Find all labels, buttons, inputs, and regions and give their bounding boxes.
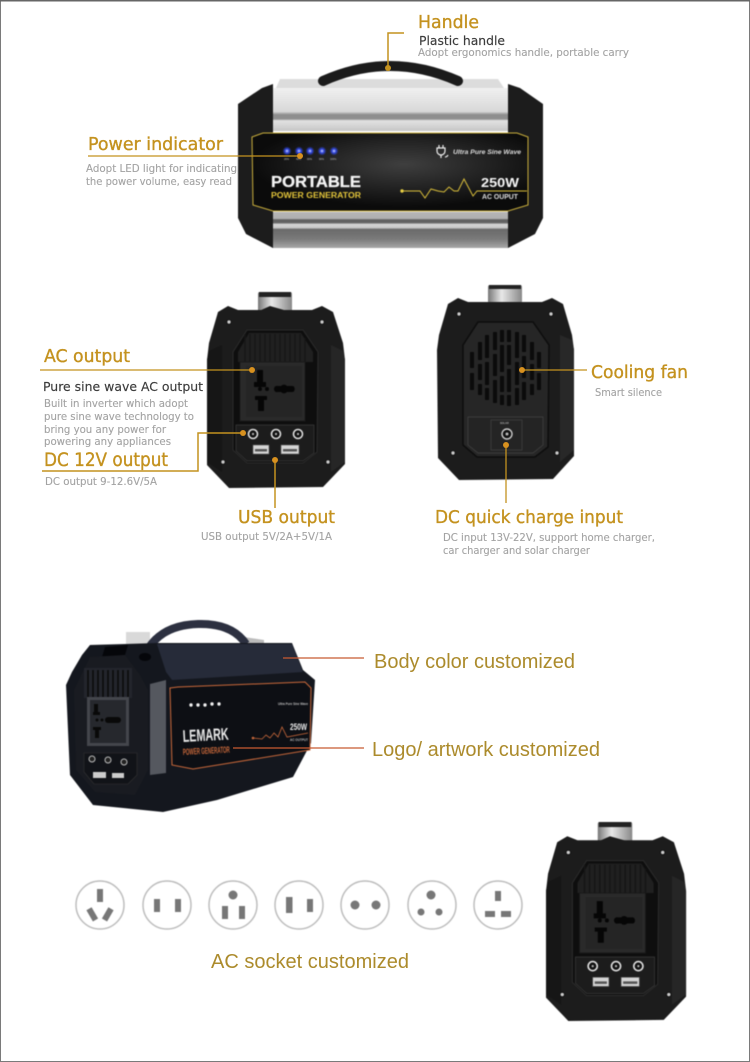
callout: DC quick charge input: car charger and solar charger [443, 545, 591, 557]
callout: AC output: bring you any power for [44, 424, 167, 436]
callout: USB output [201, 457, 335, 543]
socket type icons [76, 881, 522, 929]
black left end cap [238, 84, 273, 248]
tagline: Ultra Pure Sine Wave [278, 702, 308, 706]
caption: AC socket customized: AC socket customized [211, 951, 409, 973]
callout: AC output: powering any appliances [44, 436, 171, 448]
power LEDs: 40% [296, 158, 302, 161]
waveform line [400, 179, 527, 198]
callout: handle: Handle [418, 12, 479, 33]
waveform [252, 727, 308, 739]
DC input panel: SOLAR [500, 422, 509, 425]
power LEDs: 100% [330, 158, 337, 161]
product: front side with socket [207, 292, 345, 488]
port panel [84, 753, 137, 784]
callout: AC output: AC output [44, 346, 130, 367]
callout: DC quick charge input [435, 442, 655, 557]
corner screws [451, 312, 559, 455]
inner panel [233, 330, 318, 463]
body silhouette [66, 643, 315, 812]
power LEDs [282, 146, 338, 161]
output label: AC OUPUT [482, 194, 519, 201]
product: rear side with cooling fan [437, 285, 574, 480]
top handle tab [258, 292, 292, 318]
logo subtitle: POWER GENERATOR [183, 745, 230, 757]
icon: socket two flat [143, 881, 191, 929]
callout: AC output: Built in inverter which adopt [44, 398, 188, 410]
black right end cap [508, 84, 543, 248]
side grey strip [150, 680, 166, 775]
power LEDs: 60% [307, 158, 313, 161]
callout: power indicator [86, 134, 303, 188]
icon: socket two round [341, 881, 389, 929]
callout: power indicator: Adopt LED light for indicating [86, 163, 237, 175]
product: front side, customized socket [546, 822, 686, 1021]
callout: power indicator: the power volume, easy read [86, 176, 232, 188]
callout: DC 12V output: DC output 9-12.6V/5A [45, 476, 158, 488]
power LEDs: 80% [319, 158, 325, 161]
callout: cooling fan: Cooling fan [591, 362, 688, 383]
wattage: 250W [290, 722, 307, 732]
callout: cooling fan: Smart silence [595, 387, 662, 399]
icon: socket polarized [275, 881, 323, 929]
icon: socket UK [474, 881, 522, 929]
USB output ports [253, 445, 299, 454]
panel title: PORTABLE [271, 174, 361, 191]
power LEDs: 20% [284, 158, 290, 161]
callout: DC 12V output [42, 430, 246, 488]
icon: socket Australia [76, 881, 124, 929]
icon: plug [437, 145, 448, 158]
callout: cooling fan [519, 362, 688, 399]
callout: handle: Adopt ergonomics handle, portable carry [418, 47, 629, 59]
top handle tab [488, 285, 522, 303]
product: top view power generator [238, 66, 543, 248]
panel subtitle: POWER GENERATOR [271, 191, 361, 200]
product: customized generator in perspective [66, 624, 315, 812]
body shell [207, 306, 345, 488]
universal AC socket [240, 362, 305, 421]
callout: handle [385, 12, 629, 71]
aluminium body top [272, 79, 508, 131]
callout: body color customized: Body color customized [374, 651, 575, 673]
output label: AC OUTPUT [290, 737, 308, 742]
callout: logo artwork customized: Logo/ artwork customized [372, 739, 600, 761]
fan grill slots [472, 330, 539, 406]
metal clips [126, 632, 264, 646]
wattage: 250W [481, 175, 520, 190]
aluminium body bottom [272, 212, 508, 248]
end-face grill [84, 668, 132, 698]
callout: AC output: Pure sine wave AC output [43, 379, 203, 394]
top-left latch [102, 645, 128, 657]
callout: DC quick charge input: DC quick charge input [435, 507, 623, 528]
callout: AC output: pure sine wave technology to [44, 411, 194, 423]
carrying handle [150, 624, 246, 646]
corner screws [221, 320, 330, 464]
black label panel [252, 133, 528, 211]
callout: handle: Plastic handle [419, 33, 505, 48]
callout: USB output: USB output [238, 507, 335, 528]
port bar [236, 425, 314, 461]
screw hole [139, 653, 151, 661]
AC socket [87, 697, 129, 746]
panel tagline: Ultra Pure Sine Wave [453, 150, 522, 156]
callout: DC quick charge input: DC input 13V-22V, support home charger, [443, 532, 655, 544]
callout: power indicator: Power indicator [88, 134, 224, 155]
fan panel [463, 322, 549, 457]
body shell [437, 298, 574, 480]
octagonal end face [74, 655, 148, 795]
DC input panel [468, 417, 543, 453]
LEDs [189, 702, 221, 707]
label panel [170, 682, 311, 769]
body top face [157, 644, 303, 680]
icon: socket three round [408, 881, 456, 929]
brand logo: LEMARK [182, 725, 230, 746]
callout: AC output [40, 346, 255, 448]
callout: USB output: USB output 5V/2A+5V/1A [201, 531, 333, 543]
icon: socket two flat with ground [209, 881, 257, 929]
handle [323, 66, 458, 81]
callout: DC 12V output: DC 12V output [44, 450, 168, 471]
DC output ports [248, 430, 302, 438]
